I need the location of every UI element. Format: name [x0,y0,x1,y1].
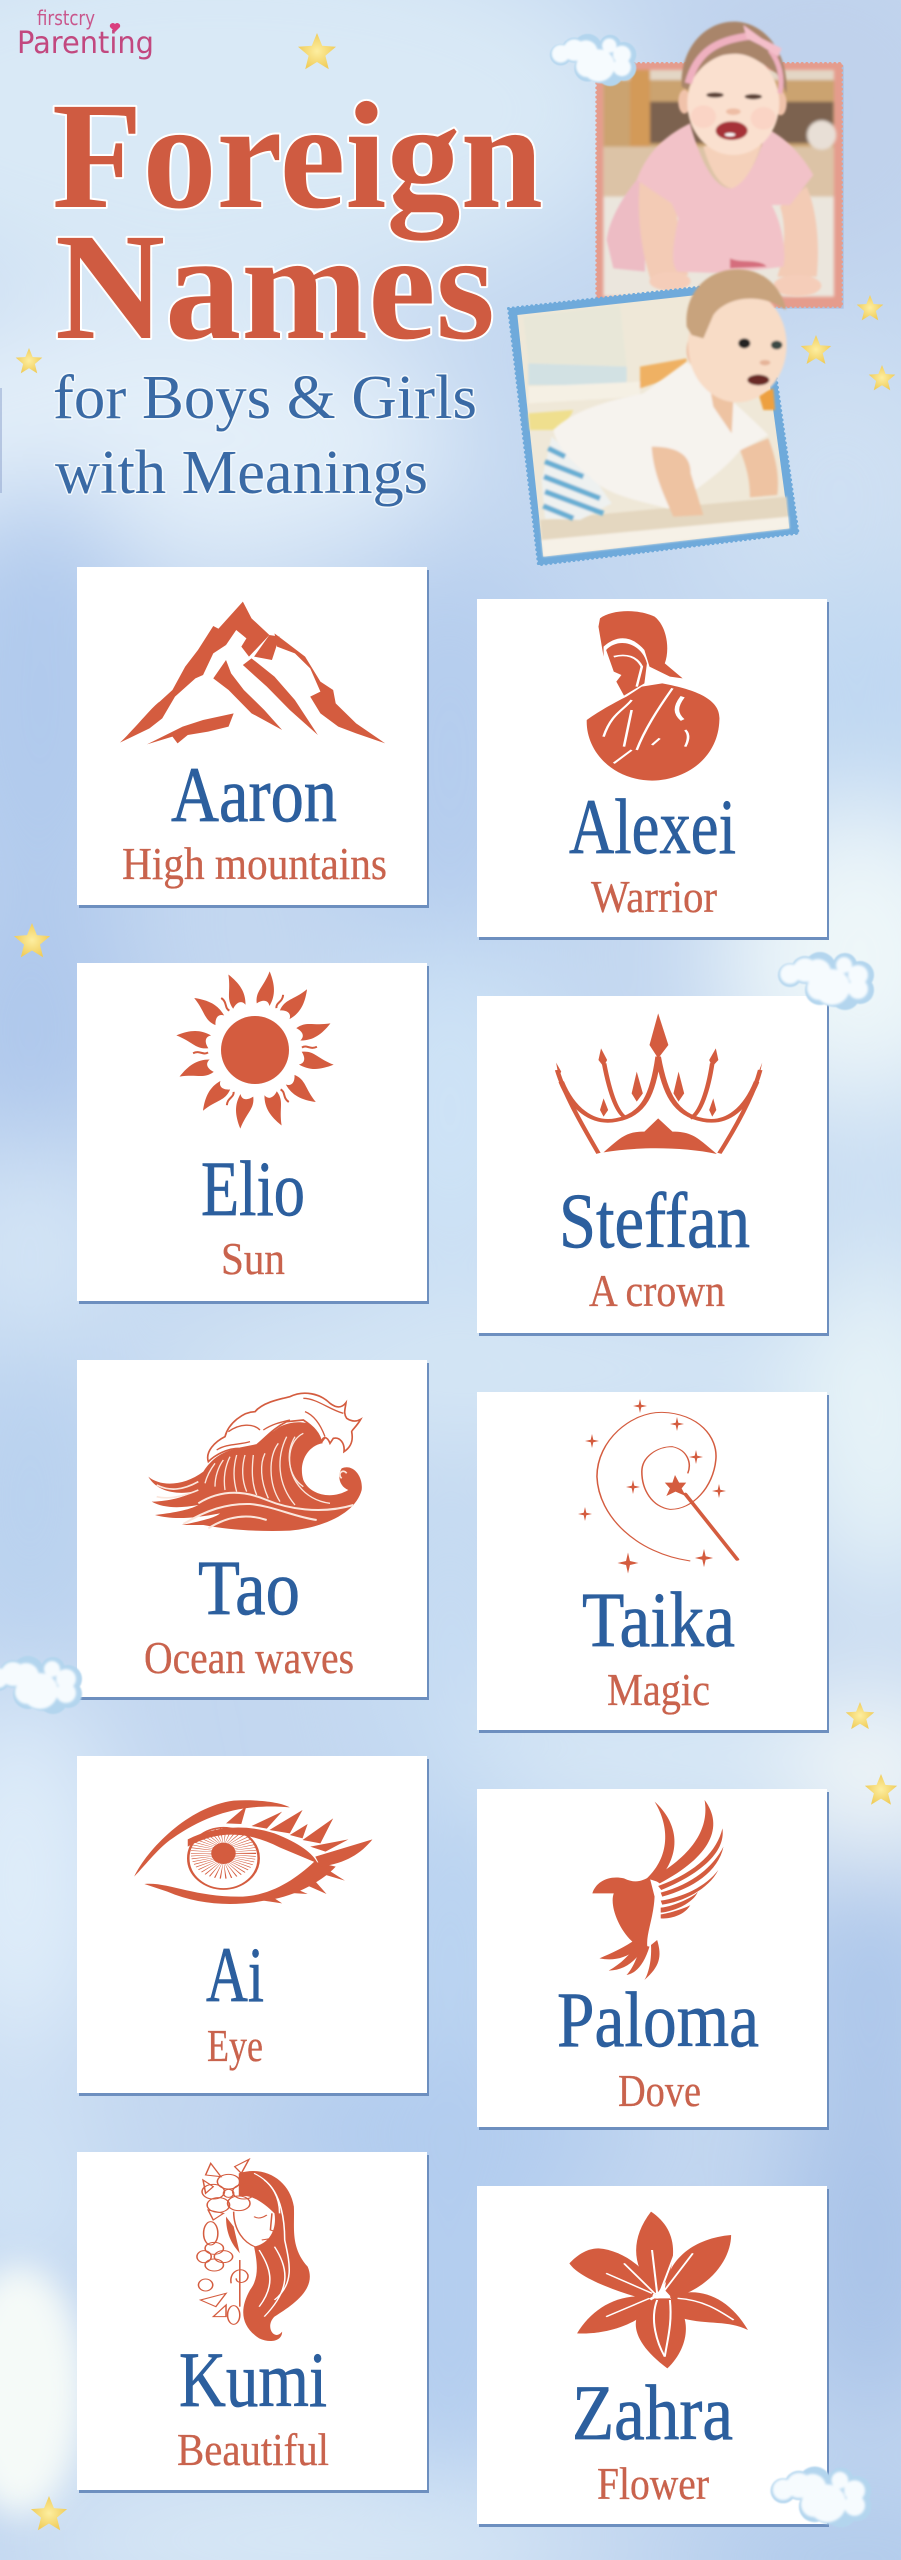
card: Paloma [477,1789,829,2130]
meaning: High mountains [122,838,387,889]
icon: ocean wave [148,1393,362,1531]
star right 2 [865,1774,897,1805]
cloud lower right [771,2467,871,2527]
star top [298,33,336,69]
cloud upper right [778,952,874,1010]
name: Ai [206,1931,264,2018]
card: Ai [77,1756,429,2096]
card background [77,963,429,1304]
star bottom left [31,2496,67,2530]
icon: sun [175,970,335,1130]
card background [477,2186,829,2527]
card: Elio [77,963,429,1304]
card background [477,1789,829,2130]
card background [477,996,829,1336]
meaning: Eye [207,2020,263,2071]
card background [77,1360,429,1700]
card: Tao [77,1360,429,1700]
meaning: Warrior [591,871,717,922]
icon: warrior [587,611,719,781]
cloud top [550,34,636,86]
meaning: Dove [618,2065,701,2116]
meaning: A crown [589,1265,725,1316]
star right 1 [846,1702,874,1729]
icon: dove [592,1800,723,1980]
star left [16,348,42,373]
meaning: Magic [607,1664,710,1715]
icon: crown [556,1013,762,1154]
icon: mountain [120,602,385,744]
subtitle: for Boys & Girls [53,364,477,432]
icon: magic wand [597,1412,737,1561]
name: Steffan [559,1177,750,1264]
name: Aaron [171,751,337,838]
logo: FirstCry Parenting [17,6,154,61]
cloud left [0,1656,82,1714]
meaning: Flower [597,2458,709,2509]
card: Alexei [477,599,829,940]
pants [542,437,612,520]
photo: baby boy [508,269,798,565]
meaning: Ocean waves [144,1632,354,1683]
meaning: Beautiful [177,2424,329,2475]
title: Foreign Names [52,72,543,372]
icon: eye [134,1800,372,1904]
card: Aaron [77,567,429,908]
card background [77,1756,429,2096]
card: Steffan [477,996,829,1336]
sparkles [578,1399,726,1574]
title: Foreign Names: Names [55,203,495,372]
name: Paloma [557,1976,759,2063]
cloud wash bottom left [0,2265,85,2515]
title: Foreign Names: Foreign [52,72,543,241]
name: Kumi [179,2336,327,2423]
card background [477,1392,829,1733]
subtitle [53,364,477,507]
meaning: Sun [221,1233,285,1284]
name: Taika [582,1576,735,1663]
logo: FirstCry Parenting: Parenting [17,26,154,61]
icon: woman with flowers [197,2159,310,2341]
card background [77,567,429,908]
card background [77,2152,429,2493]
card: Kumi [77,2152,429,2493]
name: Zahra [572,2369,733,2456]
star mid left [14,923,50,957]
photo: baby girl [597,22,844,309]
icon: lily [569,2212,748,2368]
small stars right [801,295,895,390]
name: Alexei [569,783,736,870]
card: Taika [477,1392,829,1733]
subtitle: with Meanings [55,439,428,507]
card: Zahra [477,2186,829,2527]
name: Tao [198,1544,300,1631]
name: Elio [201,1145,305,1232]
logo: FirstCry Parenting: firstcry [37,6,95,30]
card background [477,599,829,940]
